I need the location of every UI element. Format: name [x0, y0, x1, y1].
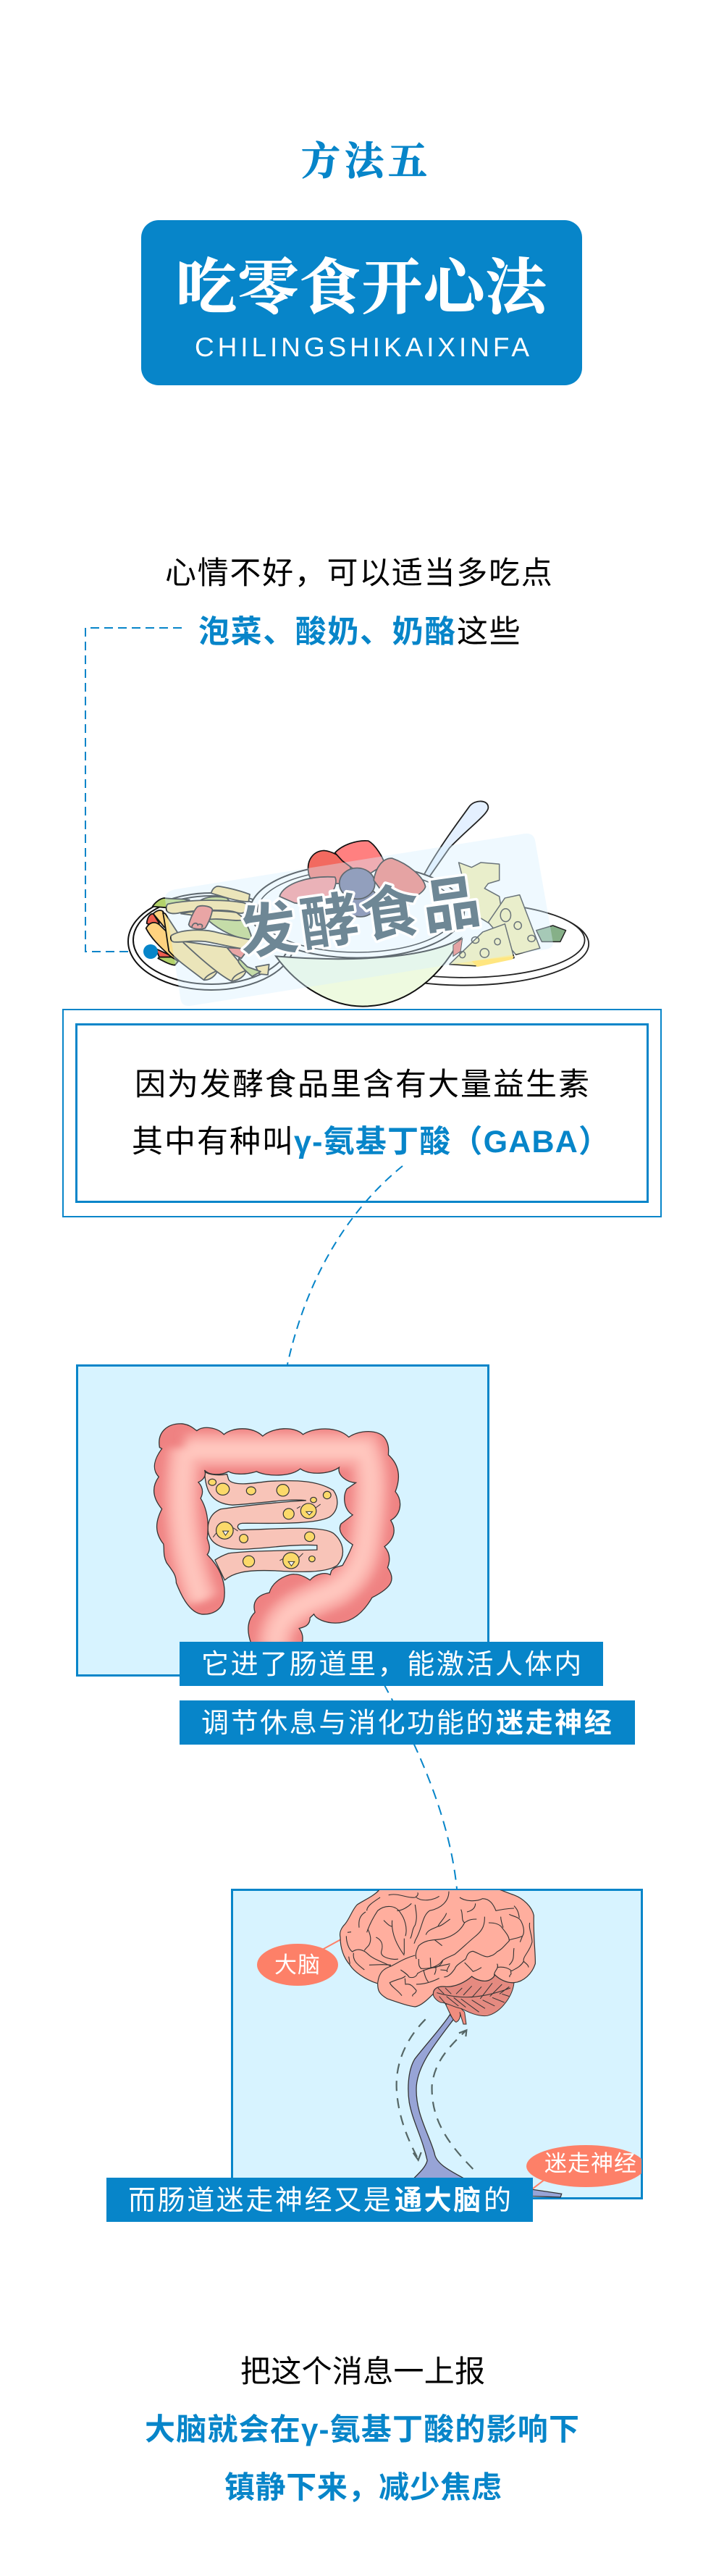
brain folds [346, 1892, 532, 1997]
cheese [450, 863, 566, 967]
dashed connector to brain [384, 1684, 457, 1889]
connector dot [143, 944, 158, 959]
closing text [145, 2354, 579, 2504]
title text: 吃零食开心法 [176, 255, 551, 322]
closing text: 大脑就会在γ-氨基丁酸的影响下 [145, 2412, 579, 2446]
caption bar: brain: 的 [484, 2186, 513, 2216]
caption bars: intestine: 迷走神经 [496, 1708, 613, 1739]
panel: brain [232, 1889, 645, 2199]
smiling faces [213, 1504, 321, 1566]
illustration: intestine [147, 1420, 407, 1646]
caption bars: intestine: 调节休息与消化功能的 [201, 1708, 495, 1739]
illustration: vagus nerve [323, 1939, 562, 2197]
translucent label panel [165, 834, 553, 1006]
cerebrum [340, 1889, 535, 2007]
bowl [250, 841, 464, 1007]
caption bar: brain: 通大脑 [395, 2186, 483, 2216]
food label: 发酵食品 [235, 868, 488, 967]
title panel [141, 220, 582, 385]
GABA text box [63, 1010, 661, 1217]
small intestine [204, 1472, 342, 1580]
caption bars: intestine [180, 1642, 635, 1745]
caption bar: brain [106, 2178, 533, 2222]
dashed arrows [397, 2019, 473, 2169]
brain stem [445, 2004, 466, 2024]
pickled vegetables [146, 886, 269, 981]
closing text: 镇静下来，减少焦虑 [224, 2470, 502, 2504]
label lines [323, 1939, 544, 2189]
right plate [340, 902, 589, 986]
dashed connector to gut [287, 1166, 403, 1364]
nerve [408, 2015, 468, 2181]
illustration: fermented food [128, 801, 589, 1007]
label: brain: 大脑 [274, 1952, 321, 1978]
illustration: brain [340, 1889, 535, 2024]
fruit [279, 841, 426, 917]
caption bars: intestine: 它进了肠道里，能激活人体内 [201, 1650, 584, 1680]
probiotics dots [209, 1479, 331, 1569]
intro text: 心情不好，可以适当多吃点 [165, 556, 553, 591]
spoon [424, 801, 488, 877]
left plate [128, 893, 295, 990]
panel: intestine [77, 1366, 488, 1676]
dashed connector to food [85, 628, 182, 952]
intro text: 这些 [457, 615, 521, 650]
GABA text box: 因为发酵食品里含有大量益生素 [135, 1067, 591, 1102]
label ellipse: vagus nerve [526, 2145, 645, 2187]
closing text: 把这个消息一上报 [240, 2354, 485, 2388]
caption bar: brain: 而肠道迷走神经又是 [128, 2186, 392, 2216]
colon [147, 1420, 407, 1646]
heading: method five: 方法五 [301, 140, 432, 183]
title pinyin: CHILINGSHIKAIXINFA [195, 332, 529, 362]
GABA text box: 其中有种叫 [132, 1125, 295, 1159]
label: vagus nerve: 迷走神经 [544, 2151, 637, 2176]
intro text: 泡菜、酸奶、奶酪 [198, 615, 457, 650]
cerebellum [433, 1975, 514, 2016]
intro text [165, 556, 553, 650]
label ellipse: brain [257, 1944, 338, 1986]
GABA text box: γ-氨基丁酸（GABA） [294, 1125, 610, 1159]
